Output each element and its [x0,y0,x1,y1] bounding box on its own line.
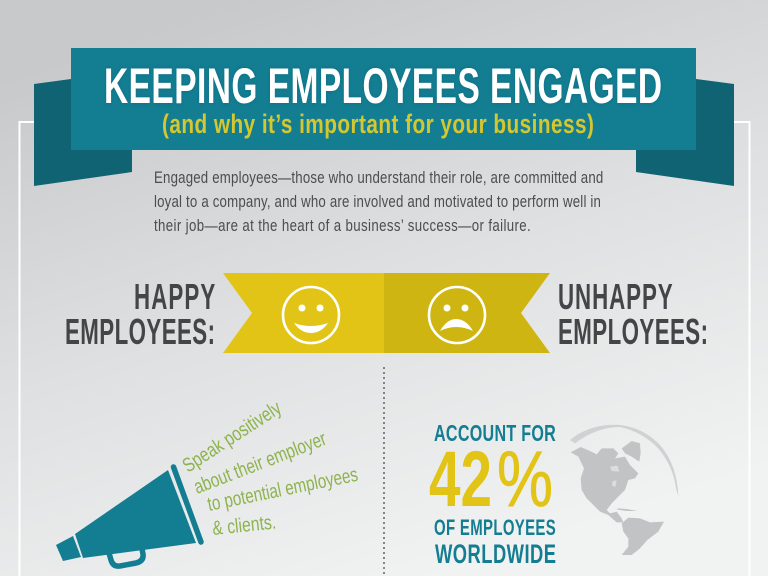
megaphone message: about their employer [191,428,330,499]
statistic: 42 [429,434,492,523]
heading: unhappy employees [558,278,708,352]
icon: frowning face [429,287,485,343]
title banner [71,48,696,150]
intro text: their job—are at the heart of a business’ success—or failure. [154,217,531,235]
statistic: % [497,434,553,523]
statistic: OF EMPLOYEES [434,515,556,540]
icon: megaphone [56,467,201,566]
heading: happy employees [65,278,215,352]
title: KEEPING EMPLOYEES ENGAGED [104,58,662,115]
ribbon fold: left [34,79,132,186]
statistic [429,421,556,569]
icon: globe [570,425,678,555]
icon: smiley face [283,287,339,343]
ribbon fold: right [636,79,734,186]
megaphone message: Speak positively [179,397,285,477]
megaphone message: & clients. [211,511,277,540]
intro text [154,169,603,235]
heading: happy employees: EMPLOYEES: [65,313,215,352]
ribbon: happy side [223,273,384,353]
megaphone message: to potential employees [206,464,360,516]
white frame line [20,122,750,576]
title: KEEPING EMPLOYEES ENGAGED [104,58,662,115]
heading: happy employees: HAPPY [134,278,215,317]
intro text: Engaged employees—those who understand their role, are committed and [154,169,603,187]
heading: unhappy employees: UNHAPPY [558,278,673,317]
subtitle: (and why it’s important for your business) [162,109,594,140]
center dotted divider [383,367,385,576]
intro text: loyal to a company, and who are involved and motivated to perform well in [154,193,601,211]
megaphone message [179,397,360,540]
ribbon: unhappy side [384,273,550,353]
statistic: ACCOUNT FOR [434,421,556,447]
statistic: WORLDWIDE [435,538,556,569]
heading: unhappy employees: EMPLOYEES: [558,313,708,352]
